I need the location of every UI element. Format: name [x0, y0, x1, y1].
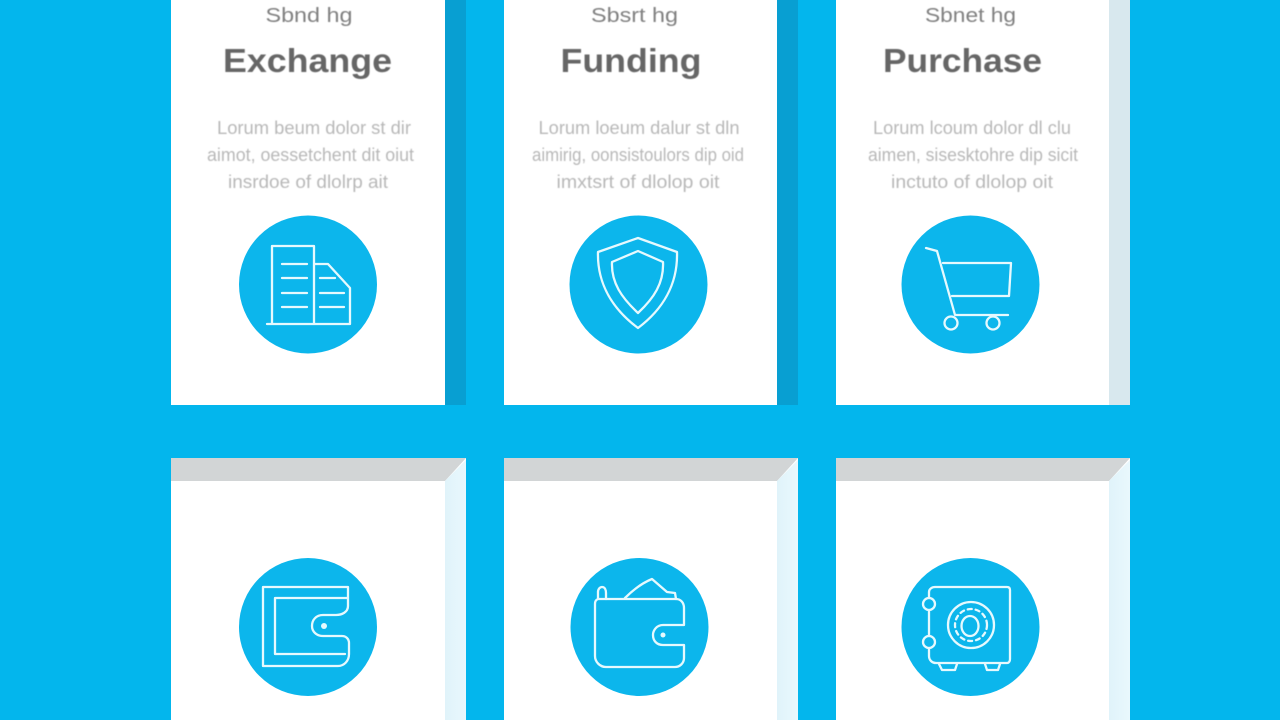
text block: Funding description: imxtsrt of dlolop oit	[556, 172, 720, 192]
panel: Exchange card	[171, 0, 466, 405]
icon: office buildings	[239, 216, 377, 354]
icon: shopping cart	[902, 216, 1040, 354]
card label: Purchase: Sbnet hg	[925, 5, 1016, 27]
text block: Purchase description	[868, 118, 1078, 192]
text block: Exchange description: aimot, oessetchent dit oiut	[207, 145, 414, 165]
panel: lower right card	[836, 458, 1130, 720]
heading: Purchase: Purchase	[883, 42, 1042, 79]
panel: Funding card	[504, 0, 798, 405]
heading: Funding: Funding	[560, 42, 702, 79]
icon: shield	[570, 216, 708, 354]
panel: Purchase card	[836, 0, 1130, 405]
icon: wallet with clasp	[239, 558, 377, 696]
text block: Exchange description	[207, 118, 414, 192]
text block: Purchase description: Lorum lcoum dolor dl clu	[873, 118, 1071, 138]
card label: Exchange: Sbnd hg	[266, 5, 352, 27]
panel: lower middle card	[504, 458, 798, 720]
text block: Exchange description: insrdoe of dlolrp ait	[228, 172, 388, 192]
card label: Funding: Sbsrt hg	[591, 5, 678, 27]
text block: Funding description: aimirig, oonsistoulors dip oid	[532, 145, 744, 165]
text block: Funding description	[532, 118, 744, 192]
text block: Purchase description: inctuto of dlolop oit	[891, 172, 1053, 192]
text block: Funding description: Lorum loeum dalur st dln	[538, 118, 740, 138]
icon: safe	[902, 558, 1040, 696]
heading: Exchange: Exchange	[223, 42, 392, 79]
panel: lower left card	[171, 458, 466, 720]
icon: open wallet with cash	[570, 558, 708, 696]
text block: Purchase description: aimen, sisesktohre dip sicit	[868, 145, 1078, 165]
text block: Exchange description: Lorum beum dolor st dir	[217, 118, 411, 138]
